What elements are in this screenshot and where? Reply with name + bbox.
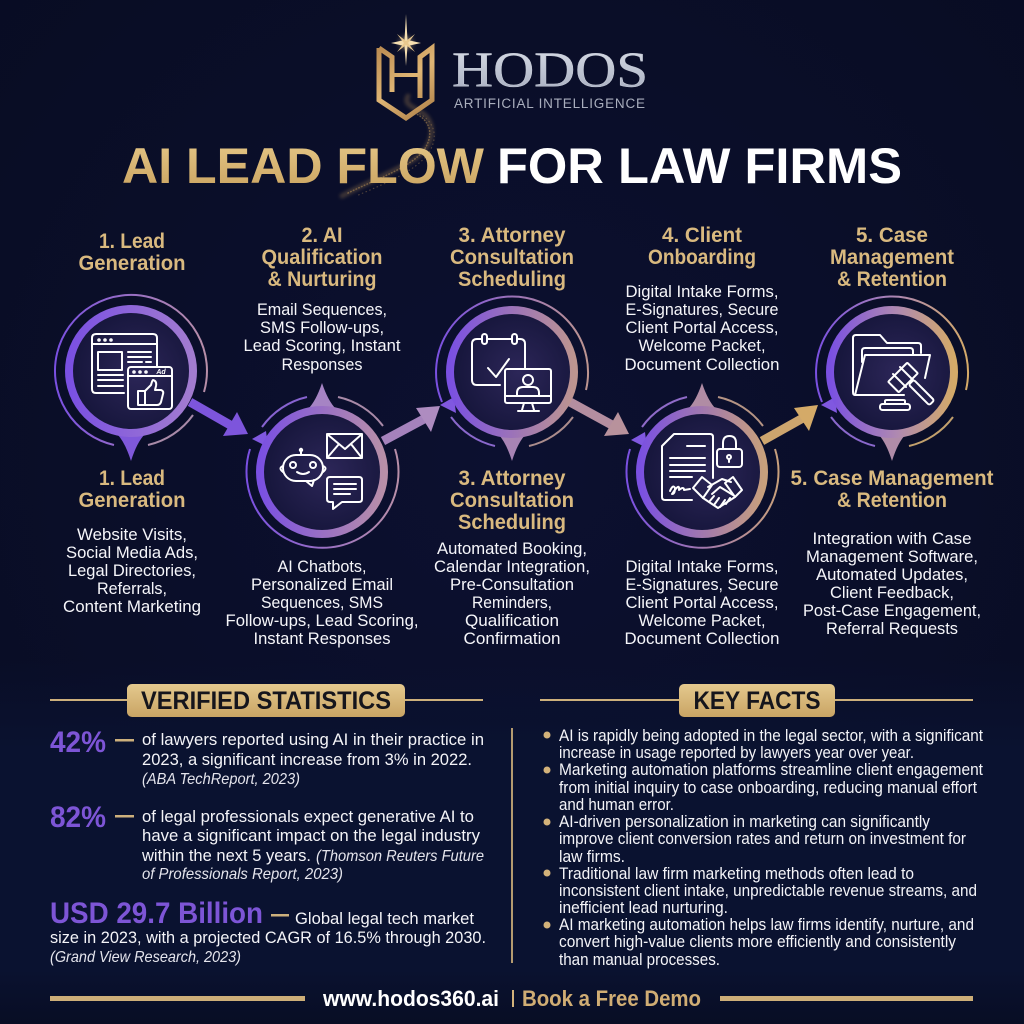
step 4 lower description: E-Signatures, Secure bbox=[626, 576, 778, 594]
stat: USD 29.7 Billion bbox=[50, 897, 486, 966]
fact 5: than manual processes. bbox=[559, 951, 720, 969]
fact 5 bbox=[544, 916, 974, 969]
step 5 top heading bbox=[830, 224, 954, 291]
step 1 description: Legal Directories, bbox=[68, 562, 196, 580]
step 3 description: Pre-Consultation bbox=[450, 576, 574, 594]
title bbox=[122, 138, 902, 194]
panel: step 3 bbox=[434, 224, 590, 648]
step 2 lower description: Instant Responses bbox=[254, 630, 390, 648]
step 2 lower description: Sequences, SMS bbox=[261, 594, 383, 612]
step 3 description: Automated Booking, bbox=[437, 540, 587, 558]
arrow: step 4 to 5 bbox=[762, 405, 818, 441]
step 4 top description: E-Signatures, Secure bbox=[626, 301, 778, 319]
panel: step 5 bbox=[790, 224, 994, 638]
step 1 description: Social Media Ads, bbox=[66, 544, 198, 562]
stat: 82% bbox=[50, 801, 484, 883]
step 2 top description bbox=[244, 301, 401, 374]
icon: document, padlock and handshake bbox=[662, 434, 742, 508]
step 5 description: Automated Updates, bbox=[816, 566, 968, 584]
fact 5: AI marketing automation helps law firms identify, nurture, and bbox=[559, 916, 974, 934]
step 5 lower heading: 5. Case Management bbox=[790, 467, 994, 490]
step 3 description: Calendar Integration, bbox=[434, 558, 590, 576]
arrow: step 2 to 3 bbox=[383, 406, 440, 441]
step 2 lower description: Personalized Email bbox=[251, 576, 393, 594]
step 4 top description: Welcome Packet, bbox=[638, 337, 766, 355]
step 1 description: Referrals, bbox=[97, 580, 167, 598]
step 3 description: Reminders, bbox=[472, 594, 552, 612]
step 2 top heading: Qualification bbox=[262, 246, 382, 269]
step 4 top heading bbox=[648, 224, 756, 269]
stat: 42%: (ABA TechReport, 2023) bbox=[142, 771, 300, 788]
step 3 top heading: 3. Attorney bbox=[458, 224, 566, 247]
step 2 top heading: 2. AI bbox=[302, 224, 342, 247]
arrow: step 3 to 4 bbox=[570, 402, 629, 436]
logo bbox=[342, 14, 648, 196]
step 2 lower description: Follow-ups, Lead Scoring, bbox=[226, 612, 418, 630]
logo wordmark: HODOS bbox=[452, 41, 648, 97]
verified statistics header bbox=[50, 684, 483, 717]
step 5 description: Management Software, bbox=[806, 548, 978, 566]
title: AI LEAD FLOW bbox=[122, 138, 485, 194]
step 1 node bbox=[55, 295, 207, 461]
stat: USD 29.7 Billion: USD 29.7 Billion bbox=[50, 897, 263, 930]
step 4 lower description: Client Portal Access, bbox=[626, 594, 778, 612]
step 5 description: Referral Requests bbox=[826, 620, 958, 638]
icon: case folder and gavel bbox=[853, 335, 934, 410]
fact 5: convert high-value clients more efficiently and consistently bbox=[559, 933, 957, 951]
panel: step 1 bbox=[55, 230, 207, 616]
step 1 lower heading: Generation bbox=[78, 489, 186, 512]
step 3 description: Qualification bbox=[465, 612, 559, 630]
stat: 82%: within the next 5 years. bbox=[141, 846, 311, 865]
step 4 top description: Client Portal Access, bbox=[626, 319, 778, 337]
fact 2: from initial inquiry to case onboarding, reducing manual effort bbox=[559, 779, 977, 797]
step 5 top heading: & Retention bbox=[837, 268, 947, 291]
step 2 node bbox=[246, 383, 398, 548]
step 4 top description: Digital Intake Forms, bbox=[626, 283, 778, 301]
step 2 top description: Responses bbox=[282, 356, 362, 374]
step 4 node bbox=[626, 383, 778, 548]
stat: 42%: 2023, a significant increase from 3% in 2022. bbox=[142, 750, 472, 769]
title: FOR LAW FIRMS bbox=[497, 138, 902, 194]
stat: 82%: (Thomson Reuters Future bbox=[316, 848, 484, 865]
footer: Book a Free Demo bbox=[522, 986, 701, 1011]
fact 3 bbox=[544, 813, 966, 866]
step 1 top heading bbox=[78, 230, 186, 275]
step 3 top heading bbox=[450, 224, 574, 291]
step 5 lower heading bbox=[790, 467, 994, 512]
fact 3: improve client conversion rates and return on investment for bbox=[559, 830, 966, 848]
step 4 top description bbox=[624, 283, 780, 374]
fact 3: AI-driven personalization in marketing can significantly bbox=[559, 813, 931, 831]
step 2 lower description: AI Chatbots, bbox=[278, 558, 366, 576]
fact 1: AI is rapidly being adopted in the legal sector, with a significant bbox=[559, 727, 983, 745]
step 4 lower description: Welcome Packet, bbox=[638, 612, 766, 630]
icon: browser window with thumbs-up ad bbox=[92, 334, 172, 409]
step 5 description bbox=[803, 530, 981, 638]
panel: key facts bbox=[540, 684, 983, 969]
step 1 lower heading: 1. Lead bbox=[99, 467, 165, 490]
step 1 description bbox=[63, 526, 201, 616]
step 5 description: Integration with Case bbox=[812, 530, 972, 548]
ad label: Ad bbox=[155, 369, 166, 376]
stat: USD 29.7 Billion: size in 2023, with a projected CAGR of 16.5% through 2030. bbox=[50, 928, 486, 947]
step 2 top description: SMS Follow-ups, bbox=[260, 319, 384, 337]
arrow: step 1 to 2 bbox=[190, 402, 248, 436]
icon: calendar with video consultation bbox=[472, 334, 551, 411]
step 3 lower heading bbox=[450, 467, 574, 534]
step 5 top heading: Management bbox=[830, 246, 954, 269]
stat: 42%: of lawyers reported using AI in their practice in bbox=[142, 730, 484, 749]
fact 4 bbox=[544, 865, 977, 917]
step 3 top heading: Scheduling bbox=[458, 268, 566, 291]
icon: chatbot, envelope and message bbox=[280, 434, 362, 509]
key facts header: KEY FACTS bbox=[694, 687, 820, 715]
footer: www.hodos360.ai bbox=[322, 986, 499, 1011]
step 2 top heading: & Nurturing bbox=[268, 268, 376, 291]
step 4 top heading: 4. Client bbox=[662, 224, 742, 247]
step 3 lower heading: Consultation bbox=[450, 489, 574, 512]
fact 4: Traditional law firm marketing methods often lead to bbox=[559, 865, 914, 883]
step 2 lower description bbox=[226, 558, 418, 648]
fact 1: increase in usage reported by lawyers year over year. bbox=[559, 744, 914, 762]
fact 3: law firms. bbox=[559, 848, 625, 866]
fact 2: and human error. bbox=[559, 796, 674, 814]
fact 2 bbox=[544, 761, 983, 814]
step 3 description bbox=[434, 540, 590, 648]
step 4 top description: Document Collection bbox=[624, 356, 780, 374]
fact 1 bbox=[544, 727, 983, 762]
step 5 node bbox=[816, 297, 968, 461]
step 3 node bbox=[436, 297, 588, 461]
step 2 top description: Lead Scoring, Instant bbox=[244, 337, 401, 355]
key facts header bbox=[540, 684, 973, 717]
stat: 42% bbox=[50, 726, 484, 788]
stat: USD 29.7 Billion: (Grand View Research, 2023) bbox=[50, 949, 241, 966]
step 3 lower heading: Scheduling bbox=[458, 511, 566, 534]
step 1 top heading: Generation bbox=[78, 252, 186, 275]
step 3 lower heading: 3. Attorney bbox=[458, 467, 566, 490]
fact 4: inconsistent client intake, unpredictable revenue streams, and bbox=[559, 882, 977, 900]
step 4 lower description bbox=[624, 558, 780, 648]
stat: 82%: 82% bbox=[50, 801, 106, 834]
panel: step 4 bbox=[624, 224, 780, 648]
step 1 lower heading bbox=[78, 467, 186, 512]
step 2 top description: Email Sequences, bbox=[257, 301, 387, 319]
step 5 description: Client Feedback, bbox=[830, 584, 954, 602]
step 1 description: Website Visits, bbox=[77, 526, 187, 544]
step 3 top heading: Consultation bbox=[450, 246, 574, 269]
stat: USD 29.7 Billion: Global legal tech market bbox=[295, 909, 474, 928]
step 2 top heading bbox=[262, 224, 382, 291]
verified statistics header: VERIFIED STATISTICS bbox=[141, 687, 391, 715]
fact 2: Marketing automation platforms streamline client engagement bbox=[559, 761, 983, 779]
stat: 42%: 42% bbox=[50, 726, 106, 759]
step 4 top heading: Onboarding bbox=[648, 246, 756, 269]
step 1 top heading: 1. Lead bbox=[99, 230, 165, 253]
step 5 lower heading: & Retention bbox=[837, 489, 947, 512]
step 4 lower description: Digital Intake Forms, bbox=[626, 558, 778, 576]
step 5 description: Post-Case Engagement, bbox=[803, 602, 981, 620]
step 5 top heading: 5. Case bbox=[856, 224, 928, 247]
step 4 lower description: Document Collection bbox=[624, 630, 780, 648]
footer bbox=[50, 986, 973, 1011]
icon: gold dust trail bbox=[342, 96, 434, 196]
logo tagline: ARTIFICIAL INTELLIGENCE bbox=[454, 96, 645, 111]
step 1 description: Content Marketing bbox=[63, 598, 201, 616]
panel: verified statistics bbox=[50, 684, 486, 966]
stat: 82%: have a significant impact on the legal industry bbox=[142, 826, 480, 845]
step 3 description: Confirmation bbox=[464, 630, 560, 648]
icon: gold shield with H bbox=[379, 48, 432, 118]
icon: sparkle star bbox=[391, 14, 421, 66]
stat: 82%: of legal professionals expect generative AI to bbox=[142, 807, 474, 826]
fact 4: inefficient lead nurturing. bbox=[559, 899, 728, 917]
panel: step 2 bbox=[226, 224, 418, 648]
stat: 82%: of Professionals Report, 2023) bbox=[142, 866, 343, 883]
